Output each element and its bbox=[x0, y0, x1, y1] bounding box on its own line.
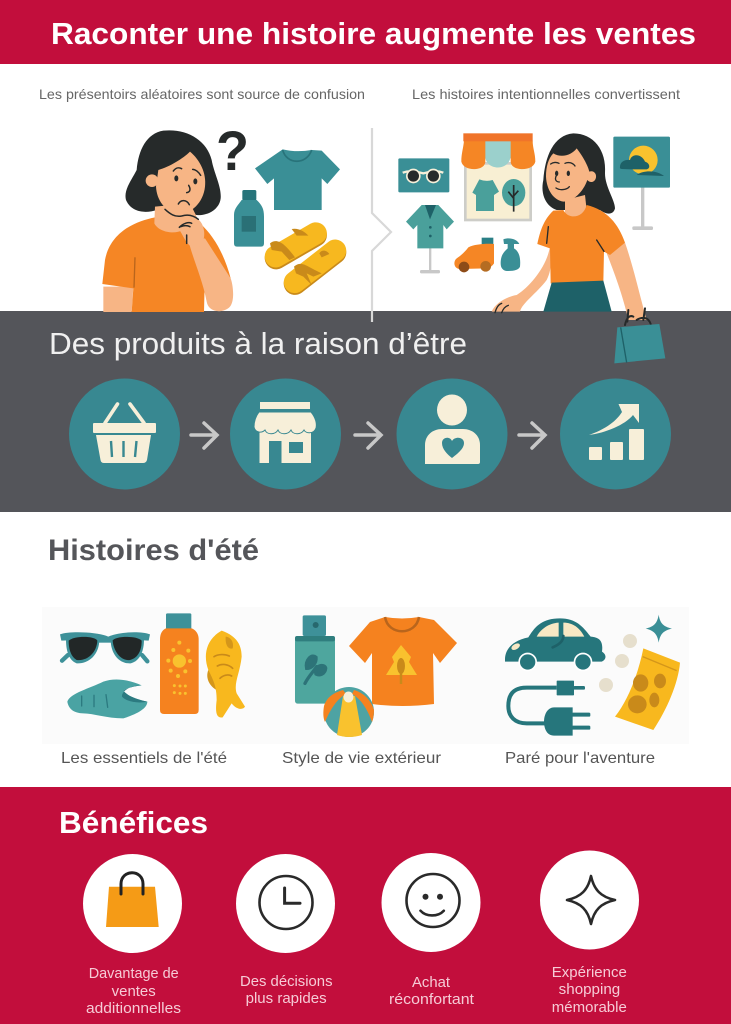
bundle: summer essentials bbox=[60, 613, 245, 718]
benefit: faster decisions: plus rapides bbox=[246, 991, 327, 1007]
icon: rising chart bbox=[560, 378, 671, 490]
heading: benefits: Bénéfices bbox=[59, 805, 208, 840]
icon: yellow towel bbox=[206, 631, 245, 717]
icon: sparkle bbox=[646, 615, 672, 643]
illustration: happy shopkeeper and story display bbox=[398, 133, 670, 320]
panel: benefits bbox=[0, 787, 731, 1024]
arrow bbox=[191, 423, 217, 448]
icons: confusing products bbox=[234, 149, 351, 300]
icon: sunscreen bbox=[160, 613, 199, 714]
icon: plug and cable bbox=[508, 681, 590, 736]
flow: basket to store to customer to growth bbox=[69, 378, 671, 490]
heading: summer stories: Histoires d'été bbox=[48, 534, 259, 567]
bundle: ready for adventure bbox=[505, 615, 680, 736]
benefit: additional sales: additionnelles bbox=[86, 1001, 181, 1017]
heading: from products to purpose: Des produits à la raison d’être bbox=[49, 326, 467, 361]
benefit: memorable experience: shopping bbox=[559, 982, 620, 998]
benefit: memorable experience: mémorable bbox=[552, 1000, 627, 1016]
icon: shirt on stand bbox=[406, 205, 454, 273]
icon: toy car bbox=[454, 238, 494, 272]
arrow bbox=[519, 423, 545, 448]
icon: question mark: ? bbox=[216, 119, 249, 182]
subheading: random displays: Les présentoirs aléatoires sont source de confusion bbox=[39, 86, 365, 102]
icon: spray bottle bbox=[295, 615, 335, 704]
icon: crumbs bbox=[599, 634, 637, 692]
illustration: confused woman bbox=[102, 130, 233, 312]
benefit: faster decisions: Des décisions bbox=[240, 974, 332, 990]
benefit: additional sales bbox=[83, 854, 183, 1017]
caption: outdoor lifestyle: Style de vie extérieur bbox=[282, 750, 442, 767]
caption: ready for adventure: Paré pour l'aventure bbox=[505, 750, 655, 767]
title: Raconter une histoire augmente les ventes bbox=[51, 16, 696, 51]
icon: sunglasses sign bbox=[398, 158, 449, 192]
icon: orange t-shirt bbox=[349, 617, 457, 706]
icon: bottle bbox=[234, 190, 264, 247]
benefit: memorable experience bbox=[540, 850, 639, 1016]
benefit: reassuring purchase: réconfortant bbox=[389, 992, 474, 1008]
icon: sun sign on stand bbox=[613, 137, 670, 230]
benefit: reassuring purchase: Achat bbox=[412, 975, 450, 991]
icon: car bbox=[505, 618, 605, 671]
benefit: additional sales: ventes bbox=[112, 984, 156, 1000]
icon: beach ball bbox=[323, 687, 374, 737]
icon: basket bbox=[69, 378, 180, 490]
arrow bbox=[355, 423, 381, 448]
icon: sunglasses bbox=[60, 632, 150, 663]
icon: shopping bag bbox=[614, 308, 665, 363]
caption: summer essentials: Les essentiels de l'été bbox=[61, 750, 227, 767]
icon: customer with heart bbox=[396, 378, 508, 490]
icon: shop window with awning bbox=[461, 133, 535, 220]
divider chevron bbox=[372, 128, 391, 322]
panel: summer product bundles bbox=[42, 607, 689, 744]
icon: t-shirt bbox=[255, 149, 340, 210]
title banner bbox=[0, 0, 731, 64]
icon: pump bottle bbox=[501, 238, 520, 271]
icon: sandals bbox=[261, 218, 351, 300]
benefit: additional sales: Davantage de bbox=[89, 966, 179, 982]
benefit: memorable experience: Expérience bbox=[552, 965, 627, 981]
subheading: intentional stories: Les histoires intentionnelles convertissent bbox=[412, 86, 680, 102]
bundle: outdoor lifestyle bbox=[295, 615, 457, 737]
benefit: reassuring purchase bbox=[382, 853, 480, 1008]
woman figure bbox=[492, 133, 647, 320]
icon: snack bag bbox=[615, 648, 680, 730]
icon: flip-flop bbox=[67, 680, 147, 718]
panel: dark band bbox=[0, 311, 731, 512]
benefit: faster decisions bbox=[236, 854, 337, 1007]
icon: store bbox=[230, 378, 341, 490]
